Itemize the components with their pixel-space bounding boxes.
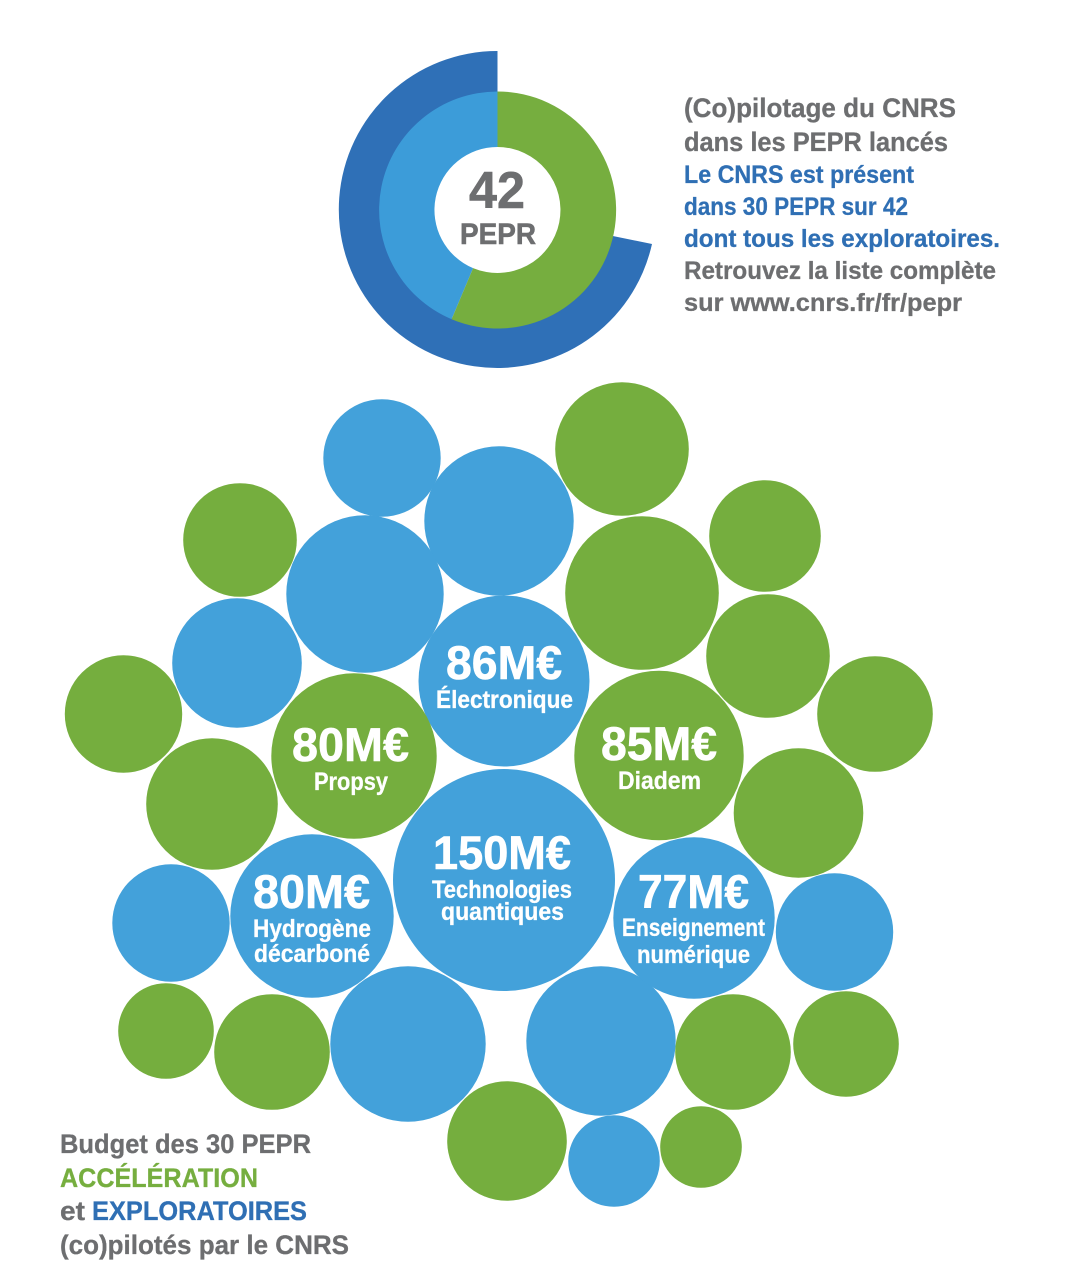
bubble: Hydrogène décarboné 80M€	[230, 834, 394, 998]
donut chart: 42 PEPR	[339, 51, 652, 368]
inner ring segment: exploratory	[379, 92, 498, 319]
bubble: Diadem 85M€: 85M€	[601, 717, 717, 770]
text block: budget legend: et	[60, 1196, 85, 1226]
text block: budget legend: (co)pilotés par le CNRS	[60, 1230, 349, 1260]
bubble: Enseignement numérique 77M€: numérique	[637, 941, 750, 969]
inner ring segment: acceleration	[452, 91, 616, 328]
bubble: Diadem 85M€: Diadem	[618, 767, 701, 795]
bubble: Technologies quantiques 150M€: Technologies	[432, 876, 572, 904]
bubble: Hydrogène décarboné 80M€: Hydrogène	[253, 915, 371, 943]
unlabelled exploratory bubbles	[112, 399, 893, 1207]
text block: CNRS co-piloting: (Co)pilotage du CNRS	[684, 93, 956, 123]
text block: budget legend: ACCÉLÉRATION	[60, 1162, 258, 1193]
bubble: Enseignement numérique 77M€	[613, 837, 775, 999]
text block: CNRS co-piloting: dont tous les exploratoires.	[684, 225, 1000, 253]
donut centre value: 42	[469, 162, 525, 220]
text block: budget legend: Budget des 30 PEPR	[60, 1129, 311, 1159]
bubble: Technologies quantiques 150M€: 150M€	[433, 826, 571, 879]
bubble: Électronique 86M€: Électronique	[436, 685, 573, 714]
text block: CNRS co-piloting: dans 30 PEPR sur 42	[684, 193, 908, 221]
text block: CNRS co-piloting: Retrouvez la liste complète	[684, 257, 996, 285]
bubble: Électronique 86M€	[418, 596, 590, 766]
bubble: Enseignement numérique 77M€: 77M€	[638, 865, 749, 918]
text block: CNRS co-piloting: dans les PEPR lancés	[684, 127, 948, 157]
bubble: Hydrogène décarboné 80M€: 80M€	[253, 865, 370, 918]
text block: budget legend	[60, 1129, 349, 1260]
bubble: Propsy 80M€: Propsy	[314, 768, 388, 796]
donut centre value: PEPR	[460, 218, 536, 251]
donut centre value	[460, 162, 536, 251]
bubble: Technologies quantiques 150M€: quantiques	[441, 898, 564, 926]
text block: CNRS co-piloting	[684, 93, 1000, 317]
bubble chart: budget of the 30 PEPR	[65, 382, 933, 1207]
text block: CNRS co-piloting: Le CNRS est présent	[684, 161, 915, 189]
bubble: Propsy 80M€	[271, 673, 437, 839]
text block: budget legend: EXPLORATOIRES	[92, 1196, 307, 1226]
bubble: Enseignement numérique 77M€: Enseignement	[622, 914, 766, 942]
bubble: Technologies quantiques 150M€	[393, 769, 615, 991]
bubble: Électronique 86M€: 86M€	[446, 636, 562, 689]
text block: CNRS co-piloting: sur www.cnrs.fr/fr/pepr	[684, 289, 962, 317]
bubble: Propsy 80M€: 80M€	[292, 718, 409, 771]
unlabelled acceleration bubbles	[65, 382, 933, 1201]
bubble: Diadem 85M€	[574, 671, 744, 840]
bubble: Hydrogène décarboné 80M€: décarboné	[254, 940, 370, 968]
outer ring: CNRS present in 30 of 42	[339, 51, 652, 368]
